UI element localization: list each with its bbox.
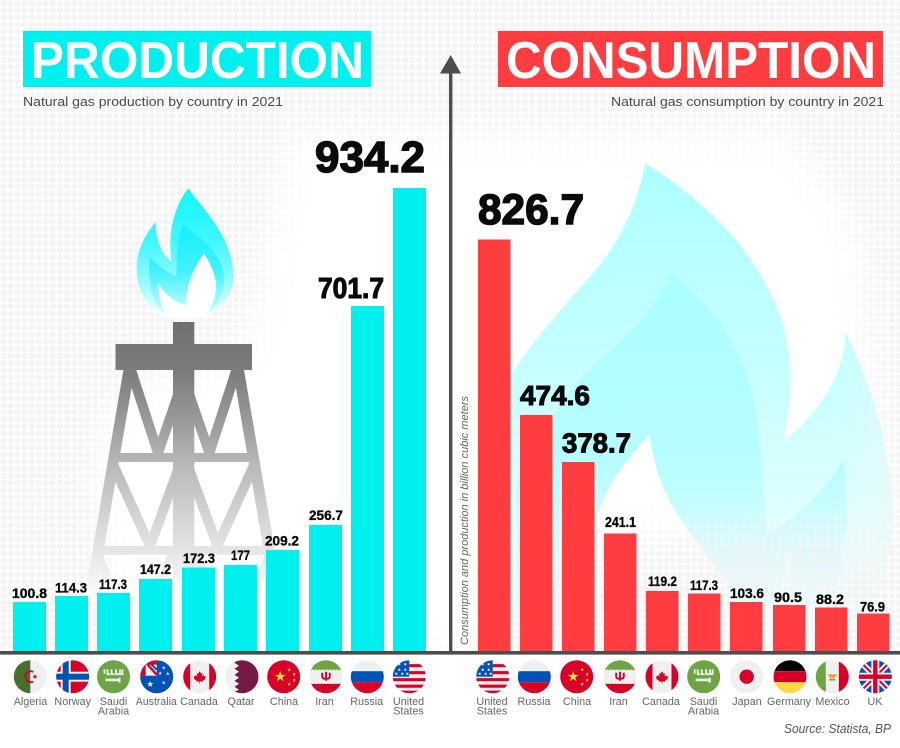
flags and country labels: production: [13, 660, 426, 718]
Algeria: Algeria: [14, 696, 47, 708]
heading: production: PRODUCTION: [31, 32, 364, 90]
bar: Algeria: [13, 602, 46, 651]
Canada: Canada: [642, 696, 680, 708]
Saudi Arabia: Saudi: [100, 696, 127, 708]
production values: 114.3: [55, 580, 87, 596]
production values: 177: [231, 547, 250, 563]
subtitle: production: Natural gas production by country in 2021: [23, 95, 283, 109]
Iran: [603, 660, 637, 708]
Iran: [309, 660, 343, 708]
Qatar: Qatar: [227, 696, 255, 708]
Saudi Arabia: Arabia: [98, 706, 129, 718]
Australia: [136, 660, 177, 708]
background flame illustration: [483, 163, 892, 650]
consumption values: 90.5: [774, 589, 802, 605]
Japan: [730, 660, 764, 708]
bar: China: [562, 462, 594, 651]
consumption values: 76.9: [860, 599, 885, 615]
UK: [858, 660, 892, 708]
Germany: [767, 660, 812, 708]
bar: Norway: [55, 596, 88, 651]
Canada: [642, 660, 680, 708]
Iran: Iran: [609, 696, 628, 708]
United States: States: [393, 706, 424, 718]
United States: [392, 660, 426, 718]
production values: 117.3: [99, 576, 127, 592]
production values: [12, 133, 425, 601]
Russia: [350, 660, 384, 708]
bar: Qatar: [224, 565, 257, 651]
consumption values: 119.2: [648, 573, 677, 589]
United States: United: [393, 696, 424, 708]
bar: United States: [393, 188, 426, 651]
Mexico: Mexico: [815, 696, 850, 708]
bar chart: production: [13, 188, 426, 651]
bar: United States: [478, 240, 510, 651]
bar: China: [266, 550, 299, 651]
Russia: Russia: [350, 696, 383, 708]
subtitle: consumption: Natural gas consumption by country in 2021: [611, 95, 884, 109]
Saudi Arabia: [96, 660, 130, 718]
bar: Japan: [730, 602, 762, 651]
bar: Canada: [182, 568, 215, 651]
bar: Russia: [351, 306, 384, 651]
Canada: Canada: [180, 696, 218, 708]
consumption values: 378.7: [562, 428, 631, 459]
Japan: Japan: [732, 696, 762, 708]
Norway: [54, 660, 92, 708]
United States: States: [477, 706, 508, 718]
source note: Source: Statista, BP: [784, 722, 892, 736]
Germany: Germany: [767, 696, 812, 708]
bar: Saudi Arabia: [688, 594, 720, 651]
bar: Iran: [604, 534, 636, 651]
consumption values: 103.6: [730, 585, 764, 601]
bar: Mexico: [815, 608, 848, 651]
bar: Canada: [646, 591, 678, 651]
Russia: [517, 660, 551, 708]
icon: gas rig tower: [81, 322, 286, 652]
United States: United: [476, 696, 508, 708]
production values: 256.7: [309, 507, 343, 523]
bar: UK: [857, 614, 890, 651]
Mexico: [815, 660, 850, 708]
UK: UK: [868, 696, 883, 708]
Saudi Arabia: [687, 660, 721, 718]
bar: Germany: [773, 605, 806, 651]
consumption values: 826.7: [478, 186, 584, 234]
Qatar: [225, 660, 259, 708]
China: China: [563, 696, 591, 708]
United States: [476, 660, 510, 718]
consumption values: [478, 186, 885, 615]
Saudi Arabia: Arabia: [688, 706, 719, 718]
China: China: [270, 696, 298, 708]
Australia: Australia: [136, 696, 177, 708]
production values: 701.7: [318, 273, 384, 305]
bar: Russia: [520, 415, 552, 651]
axis label: Consumption and production in billion cubic meters: [459, 395, 471, 645]
bar: Saudi Arabia: [97, 593, 130, 651]
Algeria: [13, 660, 47, 708]
heading: consumption: CONSUMPTION: [506, 32, 876, 90]
China: [560, 660, 594, 708]
consumption values: 117.3: [690, 577, 718, 593]
production values: 934.2: [315, 133, 425, 182]
production values: 100.8: [12, 585, 47, 601]
flags and country labels: consumption: [476, 660, 892, 718]
production values: 172.3: [183, 550, 215, 566]
Norway: Norway: [54, 696, 92, 708]
bar: Iran: [309, 525, 342, 651]
Saudi Arabia: Saudi: [690, 696, 717, 708]
China: [267, 660, 301, 708]
production values: 147.2: [140, 561, 171, 577]
production values: 209.2: [265, 533, 299, 549]
consumption values: 88.2: [816, 591, 844, 607]
Canada: [180, 660, 218, 708]
bar: Australia: [139, 579, 172, 651]
icon: gas flame: [137, 188, 233, 318]
bar chart: consumption: [478, 240, 890, 651]
consumption values: 241.1: [605, 515, 636, 531]
Russia: Russia: [517, 696, 551, 708]
consumption values: 474.6: [520, 380, 590, 411]
Iran: Iran: [315, 696, 334, 708]
